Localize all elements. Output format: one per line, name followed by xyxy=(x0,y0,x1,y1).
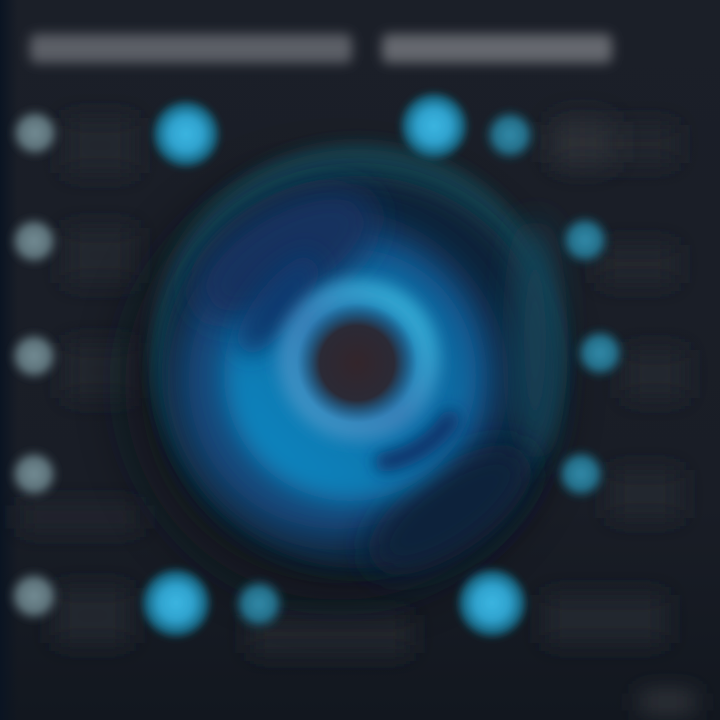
bright blue band disc xyxy=(224,249,476,501)
dark core xyxy=(297,303,417,423)
right side teal wash xyxy=(513,220,557,460)
dark halo xyxy=(125,170,555,600)
caption blocks xyxy=(20,118,695,712)
top right glow xyxy=(555,122,610,162)
outer teal disc xyxy=(152,144,564,556)
node bottom right xyxy=(454,565,530,641)
teal nodes xyxy=(231,107,627,632)
central spiral disc xyxy=(125,144,564,600)
node right 1 xyxy=(558,213,612,267)
title bar xyxy=(30,34,612,63)
node right 2 xyxy=(573,326,627,380)
dark crescent upper left of ring xyxy=(224,244,332,366)
node bottom left xyxy=(138,565,214,641)
dark lower right wedge xyxy=(348,421,552,599)
node right 3 xyxy=(554,447,608,501)
bright blue nodes xyxy=(138,89,530,641)
left column nodes xyxy=(6,106,62,624)
inner dark disc xyxy=(162,176,554,568)
node bottom xyxy=(231,576,287,632)
left node 5 xyxy=(6,568,62,624)
left node 3 xyxy=(7,329,61,383)
upper left deep blue wash xyxy=(173,162,397,348)
dark crescent lower right of ring xyxy=(385,420,450,462)
bright inner ring xyxy=(292,293,426,427)
left node 1 xyxy=(8,106,62,160)
lower left blue wash xyxy=(178,220,498,540)
left node 4 xyxy=(7,447,61,501)
node upper right xyxy=(482,107,538,163)
node top centre xyxy=(397,89,471,163)
left node 2 xyxy=(7,214,61,268)
node top left xyxy=(149,97,223,171)
